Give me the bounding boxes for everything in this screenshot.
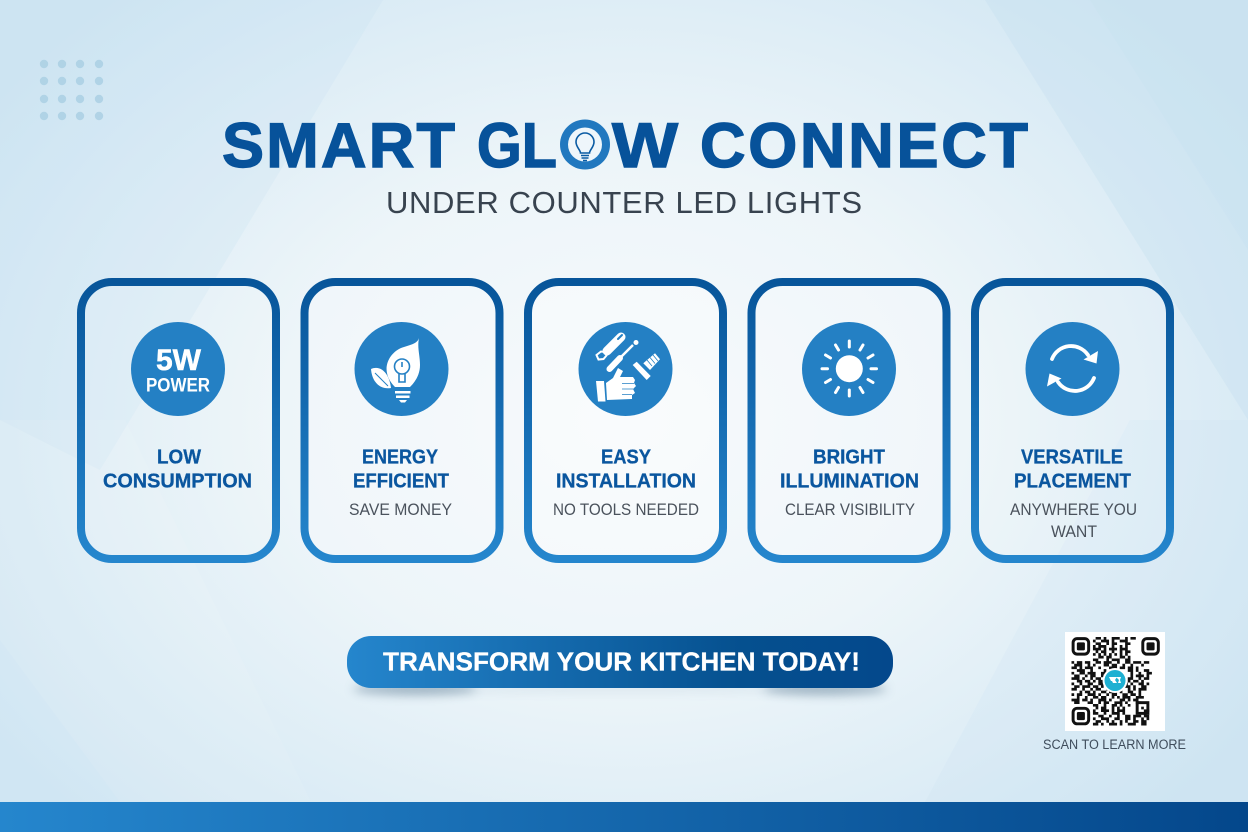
text: save money: SAVE MONEY (349, 501, 452, 519)
text: anywhere you want (1010, 501, 1137, 541)
decorative dot grid (40, 60, 103, 120)
text: anywhere you want: WANT (1051, 523, 1097, 541)
heading: bright illumination: BRIGHT (813, 446, 885, 468)
icon: 5W power: 5W (156, 344, 201, 377)
call to action button (347, 636, 893, 695)
heading: versatile placement: VERSATILE (1021, 446, 1123, 468)
heading: energy efficient: EFFICIENT (353, 470, 449, 492)
heading: versatile placement (1014, 446, 1131, 492)
heading: energy efficient (353, 446, 449, 492)
bottom bar (0, 802, 1248, 832)
call to action button: TRANSFORM YOUR KITCHEN TODAY! (383, 646, 860, 676)
icon: sun (802, 322, 896, 416)
icon: 5W power: POWER (146, 374, 210, 396)
heading: bright illumination (780, 446, 919, 492)
heading: low consumption: LOW (157, 446, 201, 468)
icon: 5W power (131, 322, 225, 416)
panel: low consumption (81, 282, 276, 559)
heading: easy installation: INSTALLATION (556, 470, 696, 492)
heading: easy installation: EASY (601, 446, 652, 468)
heading: energy efficient: ENERGY (362, 446, 439, 468)
title: SMART (222, 111, 455, 181)
panel: versatile placement (975, 282, 1170, 559)
title: CONNECT (700, 111, 1028, 181)
text: clear visibility: CLEAR VISIBILITY (785, 501, 915, 519)
heading: low consumption: CONSUMPTION (103, 470, 252, 492)
panel: bright illumination (752, 282, 946, 559)
QR caption: SCAN TO LEARN MORE (1043, 737, 1186, 752)
heading: bright illumination: ILLUMINATION (780, 470, 919, 492)
subtitle: UNDER COUNTER LED LIGHTS (386, 185, 862, 220)
title: GL (477, 111, 557, 181)
icon: title bulb in the letter O (560, 120, 610, 170)
icon: refresh arrows (1026, 322, 1120, 416)
QR code (1065, 632, 1165, 731)
heading: low consumption (103, 446, 252, 492)
heading: versatile placement: PLACEMENT (1014, 470, 1131, 492)
icon: leaf and bulb (354, 322, 448, 416)
title (222, 111, 1028, 181)
icon: tools and hand (578, 322, 672, 416)
panel: easy installation (528, 282, 723, 559)
title: W (612, 111, 679, 181)
text: no tools needed: NO TOOLS NEEDED (553, 501, 699, 519)
text: anywhere you want: ANYWHERE YOU (1010, 501, 1137, 519)
panel: energy efficient (304, 282, 500, 559)
heading: easy installation (556, 446, 696, 492)
